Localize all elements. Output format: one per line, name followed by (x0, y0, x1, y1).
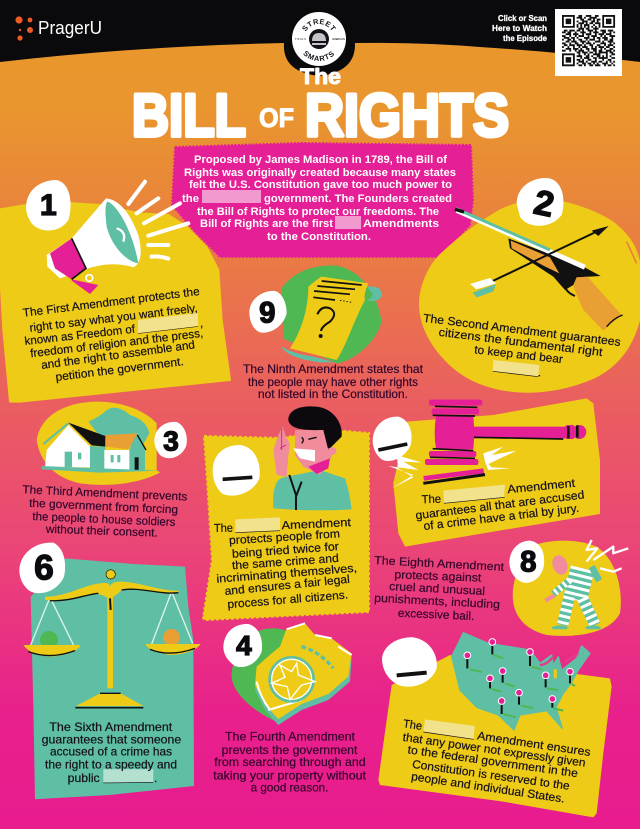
Street Smarts badge: SMARTS (304, 51, 334, 62)
number: 6 (19, 543, 65, 593)
number: 2 (517, 178, 563, 226)
panel: eighth amendment (374, 540, 628, 636)
number: 6: 6 (34, 548, 54, 587)
text: fifth amendment: The (214, 522, 233, 535)
text: first amendment: known as Freedom of (24, 323, 136, 348)
number: blank (382, 637, 437, 687)
intro text: Proposed by James Madison in 1789, the Bill of (194, 154, 447, 166)
text: eighth amendment (374, 554, 505, 623)
panel: seventh amendment (373, 398, 600, 547)
text: ninth amendment: the people may have other rights (248, 376, 418, 389)
text: seventh amendment: guarantees all that are accused (415, 488, 585, 522)
Street Smarts badge (292, 12, 346, 66)
text: second amendment: citizens the fundamental right (438, 326, 604, 359)
text: first amendment: right to say what you want freely, (29, 302, 198, 335)
text: third amendment: The Third Amendment prevents (22, 483, 188, 504)
text: fifth amendment (214, 516, 358, 611)
text: first amendment: The First Amendment protects the (22, 285, 200, 320)
panel: ninth amendment (243, 266, 424, 401)
number: blank (213, 445, 260, 496)
number: 9: 9 (259, 297, 275, 330)
text: seventh amendment: The (421, 493, 441, 506)
text: tenth amendment: people and individual States. (410, 770, 565, 806)
header band (0, 0, 640, 76)
text: second amendment: The Second Amendment guarantees (422, 312, 622, 349)
number: 3: 3 (163, 426, 179, 457)
PragerU logo: PragerU (38, 18, 102, 38)
title (132, 64, 509, 149)
text: sixth amendment: guarantees that someone (42, 733, 181, 746)
text: sixth amendment: accused of a crime has (50, 746, 172, 759)
icon: prisoner (545, 540, 628, 629)
panel: second amendment (419, 178, 640, 393)
title: OF (259, 103, 294, 133)
text: third amendment: the government from forcing (29, 497, 178, 516)
text: sixth amendment: The Sixth Amendment (49, 721, 173, 734)
icon: person pleading silence (273, 406, 352, 510)
text: fourth amendment: prevents the government (222, 744, 358, 757)
text: tenth amendment: that any power not expressly given (402, 731, 586, 770)
icon: scales of justice (23, 570, 201, 708)
icon: gavel (388, 400, 586, 488)
title: RIGHTS (305, 82, 509, 149)
text: first amendment (22, 285, 204, 384)
title: The (300, 64, 341, 89)
intro text: felt the U.S. Constitution gave too much power to (189, 179, 452, 191)
panel: fourth amendment (213, 623, 367, 795)
Street Smarts badge: STREET (302, 18, 336, 31)
intro panel (172, 143, 473, 257)
text: fifth amendment: incriminating themselves, (216, 562, 358, 586)
QR code (555, 9, 622, 76)
intro text: to the Constitution. (267, 231, 371, 243)
intro text: Amendments (363, 218, 439, 230)
text: tenth amendment: The (402, 717, 423, 733)
number: 1 (26, 180, 71, 230)
text: eighth amendment: excessive bail. (398, 607, 475, 623)
QR call to action: Click or Scan (498, 13, 547, 23)
number: 4: 4 (236, 630, 252, 661)
Street Smarts badge: TOOLS (295, 37, 306, 41)
text: fifth amendment: Amendment (281, 516, 352, 532)
text: tenth amendment: Amendment ensures (476, 729, 592, 759)
intro text: Bill of Rights are the first (200, 218, 333, 230)
text: third amendment (22, 483, 188, 540)
intro text: the (182, 193, 199, 205)
text: fourth amendment (213, 731, 367, 795)
text: ninth amendment: The Ninth Amendment states that (243, 363, 424, 376)
number: 8: 8 (520, 546, 536, 579)
text: sixth amendment: . (154, 772, 157, 785)
text: eighth amendment: The Eighth Amendment (374, 554, 505, 574)
number: 3 (154, 422, 187, 458)
text: ninth amendment (243, 363, 424, 401)
text: first amendment: petition the government. (55, 355, 184, 384)
QR call to action (492, 13, 547, 43)
icon: megaphone (47, 182, 188, 294)
text: fourth amendment: a good reason. (251, 782, 328, 795)
number: 1: 1 (40, 189, 57, 222)
intro text: Rights was originally created because many states (184, 167, 456, 179)
text: tenth amendment: to the federal government in the (407, 743, 579, 780)
panel: first amendment (0, 180, 230, 402)
text: fifth amendment: and ensures a fair legal (224, 573, 350, 598)
intro text: government. The Founders created (264, 193, 452, 205)
number: blank (373, 417, 412, 461)
number: 2: 2 (530, 183, 558, 225)
text: fifth amendment: process for all citizens. (227, 588, 349, 611)
icon: scroll (281, 266, 382, 363)
text: fourth amendment: from searching through and (214, 756, 366, 769)
title: BILL (132, 82, 246, 149)
text: first amendment: freedom of religion and the press, (30, 327, 204, 360)
text: fourth amendment: The Fourth Amendment (225, 731, 356, 744)
text: sixth amendment: public (68, 772, 100, 785)
text: third amendment: without their consent. (45, 523, 158, 540)
text: second amendment: to keep and bear (474, 343, 564, 366)
intro text: the Bill of Rights to protect our freedoms. The (197, 206, 439, 218)
text: fifth amendment: protects people from (229, 527, 340, 547)
text: first amendment: and the right to assemble and (40, 338, 196, 372)
icon: house (42, 408, 160, 473)
icon: police badge (232, 623, 352, 725)
icon: map of USA with pins (452, 633, 590, 730)
text: sixth amendment: the right to a speedy and (45, 758, 177, 771)
text: eighth amendment: punishments, including (374, 592, 500, 611)
text: seventh amendment: Amendment (507, 477, 577, 496)
text: seventh amendment (415, 477, 585, 533)
text: tenth amendment (402, 717, 592, 806)
QR call to action: Here to Watch (492, 23, 547, 33)
text: ninth amendment: not listed in the Constitution. (258, 388, 408, 401)
text: seventh amendment: of a crime have a trial by jury. (423, 502, 580, 533)
panel: third amendment (22, 402, 188, 540)
text: fourth amendment: taking your property without (213, 769, 367, 782)
text: eighth amendment: cruel and unusual (389, 580, 485, 598)
panel: tenth amendment (378, 633, 612, 817)
text: tenth amendment: Constitution is reserved to the (411, 758, 571, 793)
icon: rifle and arrow (455, 209, 623, 331)
text: eighth amendment: protects against (394, 568, 482, 585)
text: second amendment (422, 312, 622, 366)
text: fifth amendment: the same crime and (232, 552, 339, 572)
QR call to action: the Episode (503, 33, 547, 43)
text: sixth amendment (42, 721, 181, 785)
text: fifth amendment: being tried twice for (232, 540, 339, 561)
text: third amendment: the people to house soldiers (32, 510, 176, 529)
PragerU logo (15, 16, 102, 41)
panel: sixth amendment (19, 543, 201, 799)
intro text (182, 154, 456, 243)
Street Smarts badge: AMERICAN (332, 37, 345, 41)
panel: fifth amendment (203, 406, 369, 620)
text: first amendment: , (200, 317, 203, 330)
